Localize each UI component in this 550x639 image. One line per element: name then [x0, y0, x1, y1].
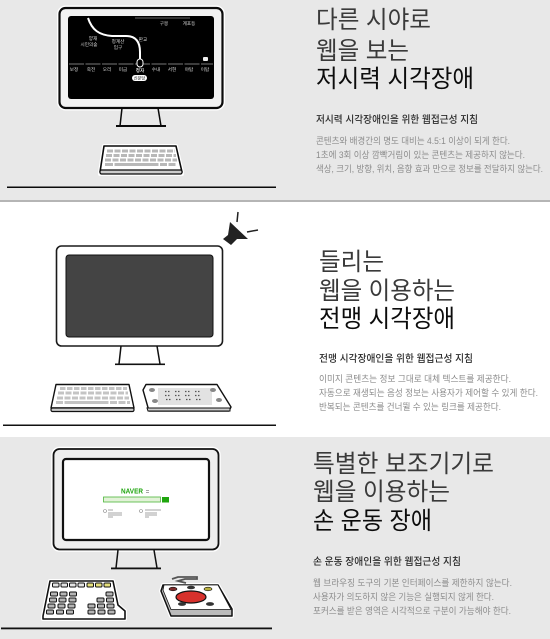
subheading: motor disability: 손 운동 장애인을 위한 웹접근성 지침: [313, 555, 461, 568]
panel: low vision: [0, 0, 550, 202]
keyboard: [51, 384, 134, 412]
subway map: 양재: [89, 35, 97, 42]
subway map: 계포등: [183, 20, 195, 27]
subheading: blindness: 전맹 시각장애인을 위한 웹접근성 지침: [319, 352, 473, 365]
keyboard: [100, 146, 182, 174]
subway map: 입구: [114, 44, 122, 51]
heading: blindness: [319, 248, 455, 333]
body text: blindness: [319, 374, 538, 412]
subway map: 오리: [103, 66, 111, 73]
panel: motor disability: [0, 437, 550, 639]
heading: blindness: 전맹 시각장애: [319, 305, 455, 333]
heading: blindness: 들리는: [319, 248, 384, 276]
monitor with high contrast map: [60, 8, 222, 127]
subheading: low vision: 저시력 시각장애인을 위한 웹접근성 지침: [316, 113, 478, 126]
panel: blindness: [0, 202, 550, 437]
subway map: 미금: [119, 66, 127, 73]
subway map: 죽전: [87, 66, 95, 73]
heading: motor disability: 특별한 보조기기로: [313, 450, 494, 478]
icon: speaker: [223, 212, 258, 245]
heading: motor disability: [313, 450, 494, 535]
body text: motor disability: 포커스를 받은 영역은 시각적으로 구분이 가능해야 한다.: [313, 605, 511, 616]
body text: motor disability: 사용자가 의도하지 않은 기능은 실행되지 않게 한다.: [313, 591, 494, 602]
subway map: [69, 18, 213, 81]
subway map: 이탑: [201, 66, 210, 73]
monitor with blank screen: [56, 246, 222, 365]
subway map: 판교: [139, 36, 147, 42]
search page: [104, 488, 169, 517]
body text: motor disability: 웹 브라우징 도구의 기본 인터페이스를 제한하지 않는다.: [313, 578, 512, 588]
heading: motor disability: 웹을 이용하는: [313, 478, 450, 506]
subway map: 신분당: [134, 75, 145, 81]
subway map: 청계산: [112, 38, 125, 45]
body text: blindness: 반복되는 콘텐츠를 건너뛸 수 있는 링크를 제공한다.: [319, 401, 501, 412]
braille keyboard: [143, 384, 231, 411]
body text: blindness: 이미지 콘텐츠는 정보 그대로 대체 텍스트를 제공한다.: [319, 374, 511, 384]
heading: low vision: 저시력 시각장애: [316, 65, 474, 93]
trackball device: [161, 577, 232, 616]
subway map: 야탑: [185, 66, 194, 73]
special keypad: [43, 581, 125, 619]
heading: blindness: 웹을 이용하는: [319, 277, 455, 305]
left key block: [46, 592, 76, 614]
search page: NAVER: [121, 488, 143, 496]
right key block: [88, 592, 115, 614]
monitor with search page: [54, 449, 218, 569]
subway map: 보정: [70, 66, 78, 72]
heading: low vision: 다른 시야로: [316, 6, 431, 34]
heading: low vision: 웹을 보는: [316, 37, 409, 65]
heading: low vision: [316, 6, 474, 93]
body text: low vision: [316, 135, 543, 174]
subway map: 구몽: [160, 21, 168, 27]
function keys: [52, 583, 110, 587]
subway map: 정자: [136, 67, 145, 74]
subway map: 시민의숲: [81, 41, 97, 48]
subway map: 수내: [152, 66, 160, 73]
body text: low vision: 콘텐츠와 배경간의 명도 대비는 4.5:1 이상이 되게 한다.: [316, 135, 510, 146]
body text: low vision: 1초에 3회 이상 깜빡거림이 있는 콘텐츠는 제공하지 않는다.: [316, 149, 525, 160]
subway map: 서현: [168, 66, 176, 73]
body text: blindness: 자동으로 재생되는 음성 정보는 사용자가 제어할 수 있게 한다.: [319, 387, 538, 398]
body text: motor disability: [313, 578, 512, 616]
heading: motor disability: 손 운동 장애: [313, 507, 432, 535]
